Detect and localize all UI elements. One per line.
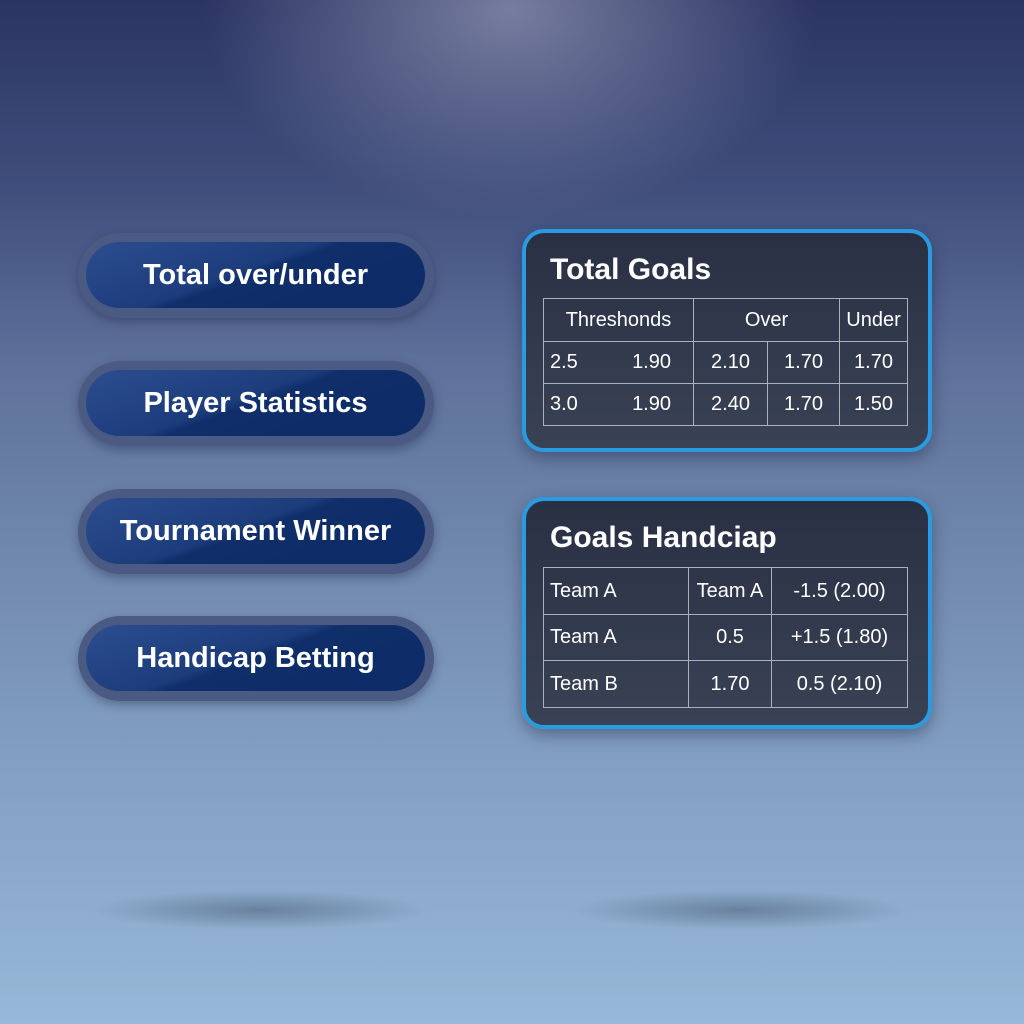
table: total goals: 1.90 bbox=[632, 351, 671, 373]
table: total goals: 2.10 bbox=[711, 351, 750, 373]
table: goals handicap: Team A bbox=[697, 580, 763, 602]
heading: Total Goals bbox=[550, 253, 711, 286]
table: total goals: 1.70 bbox=[784, 393, 823, 415]
table: total goals: 2.5 bbox=[550, 351, 578, 373]
table: total goals: 1.90 bbox=[632, 393, 671, 415]
button: Tournament Winner bbox=[78, 489, 434, 574]
button: Total over/under bbox=[78, 233, 434, 318]
panel: Goals Handicap bbox=[522, 497, 932, 729]
panel: Total Goals bbox=[522, 229, 932, 452]
table: goals handicap bbox=[543, 567, 908, 708]
table: goals handicap: Team A bbox=[550, 626, 617, 648]
table: total goals: Under bbox=[846, 308, 901, 330]
table: goals handicap: 0.5 (2.10) bbox=[797, 672, 882, 694]
table: total goals: Over bbox=[745, 308, 788, 330]
table: total goals: 3.0 bbox=[550, 393, 578, 415]
table: goals handicap: Team B bbox=[550, 672, 618, 694]
table: total goals: 1.70 bbox=[854, 351, 893, 373]
shadow right bbox=[570, 890, 910, 930]
table: total goals: 1.50 bbox=[854, 393, 893, 415]
button: Player Statistics bbox=[78, 361, 434, 446]
button: Total over/under: Total over/under bbox=[143, 258, 368, 290]
shadow left bbox=[90, 890, 430, 930]
button: Tournament Winner: Tournament Winner bbox=[120, 514, 391, 546]
button: Handicap Betting: Handicap Betting bbox=[136, 642, 375, 674]
table: goals handicap: -1.5 (2.00) bbox=[793, 580, 886, 602]
table: goals handicap: +1.5 (1.80) bbox=[791, 626, 888, 648]
heading: Goals Handciap bbox=[550, 521, 777, 554]
table: total goals bbox=[543, 298, 908, 426]
table: total goals: Threshonds bbox=[566, 308, 671, 330]
button: Handicap Betting bbox=[78, 616, 434, 701]
table: total goals: 1.70 bbox=[784, 351, 823, 373]
button: Player Statistics: Player Statistics bbox=[143, 386, 368, 418]
table: goals handicap: 1.70 bbox=[711, 672, 749, 694]
table: goals handicap: Team A bbox=[550, 580, 617, 602]
table: total goals: 2.40 bbox=[711, 393, 750, 415]
table: goals handicap: 0.5 bbox=[716, 626, 744, 648]
